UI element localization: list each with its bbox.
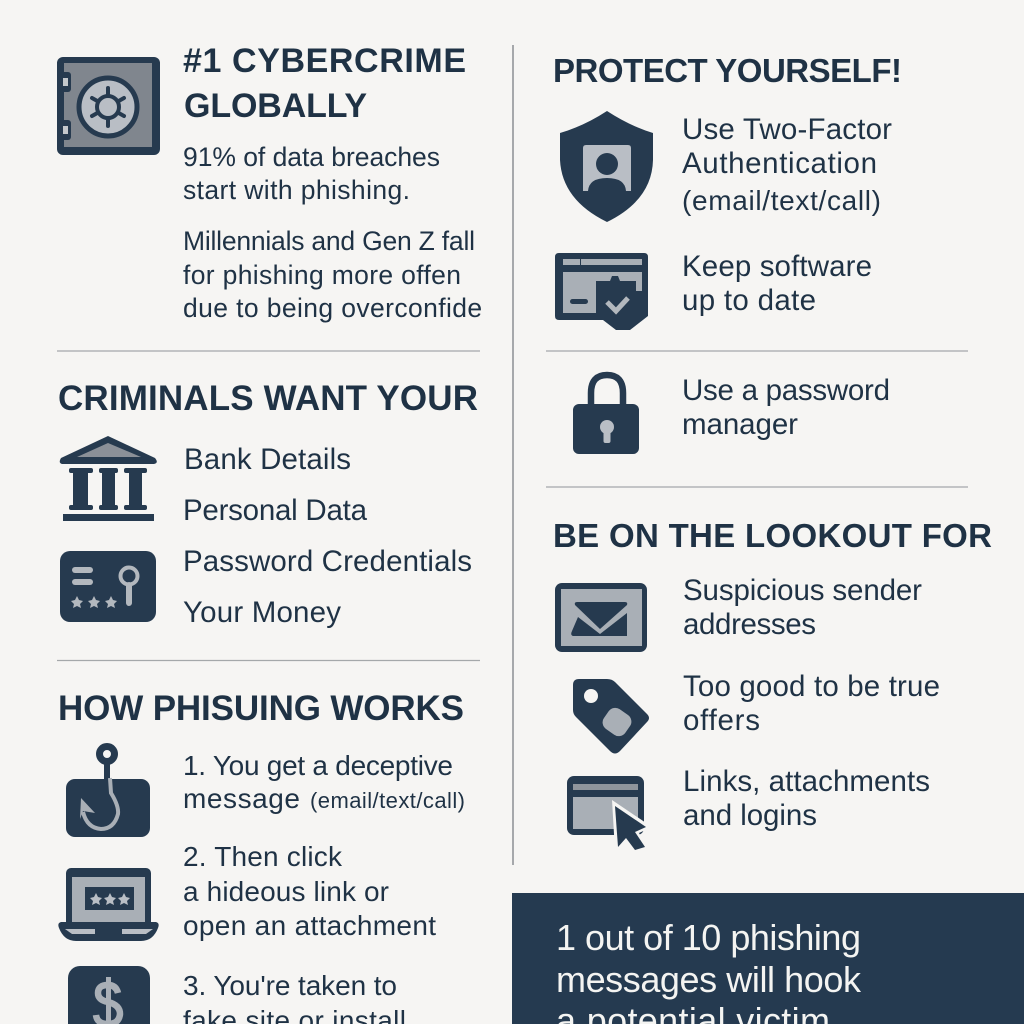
list: what criminals want: Personal Data	[183, 494, 368, 527]
text: keep software up to date: up to date	[682, 284, 816, 317]
text: step two: a hideous link or	[183, 876, 389, 907]
panel: criminals want your	[58, 379, 478, 629]
text: too good to be true: offers	[683, 704, 760, 737]
text: suspicious sender addresses	[683, 574, 922, 641]
text: two-factor authentication: Authentication	[682, 147, 877, 180]
text: step three	[183, 970, 406, 1024]
text: too good to be true: Too good to be true	[683, 670, 940, 703]
text: step one: 1. You get a deceptive	[183, 750, 453, 781]
icon: bank	[60, 436, 157, 521]
list: what criminals want	[183, 443, 472, 629]
heading: #1 cybercrime globally: GLOBALLY	[184, 87, 367, 125]
heading: be on the lookout for: BE ON THE LOOKOUT FOR	[553, 517, 992, 554]
list: what criminals want: Bank Details	[184, 443, 351, 476]
icon: price tag	[573, 679, 649, 754]
text: keep software up to date: Keep software	[682, 250, 872, 283]
callout: 1 out of 10: 1 out of 10 phishing	[556, 917, 861, 958]
text: millennials and Gen Z: Millennials and Gen Z fall	[183, 226, 475, 256]
text: millennials and Gen Z	[183, 230, 481, 322]
text: step two: open an attachment	[183, 910, 436, 941]
icon: shield with user	[560, 111, 653, 222]
text: two-factor authentication: Use Two-Factor	[682, 113, 892, 146]
text: millennials and Gen Z: for phishing more offen	[183, 260, 461, 290]
callout: 1 out of 10: messages will hook	[556, 959, 862, 1000]
text: two-factor authentication	[682, 113, 892, 216]
text: use a password manager: manager	[682, 408, 798, 441]
text: use a password manager: Use a password	[682, 374, 890, 407]
icon: safe	[57, 57, 160, 155]
text: data breach statistic: 91% of data breaches	[183, 142, 440, 172]
heading: #1 cybercrime globally: #1 CYBERCRIME	[183, 42, 466, 80]
text: links attachments logins: and logins	[683, 799, 817, 832]
heading: criminals want your: CRIMINALS WANT YOUR	[58, 379, 478, 418]
text: use a password manager	[682, 374, 890, 441]
text: keep software up to date	[682, 250, 872, 317]
panel: how phishing works	[58, 689, 465, 1024]
text: step one: message	[183, 783, 300, 814]
text: step two: 2. Then click	[183, 841, 343, 872]
callout: 1 out of 10	[512, 893, 1024, 1024]
text: two-factor authentication: (email/text/call)	[682, 185, 881, 216]
text: step three: 3. You're taken to	[183, 970, 397, 1001]
heading: protect yourself: PROTECT YOURSELF!	[553, 52, 902, 89]
icon: fish hook	[66, 746, 150, 837]
icon: dollar box	[68, 966, 150, 1024]
text: millennials and Gen Z: due to being overconfident	[183, 293, 506, 323]
text: data breach statistic: start with phishing.	[183, 175, 410, 205]
icon: browser with shield check	[555, 253, 648, 330]
text: step one	[183, 750, 465, 814]
panel: number one cybercrime	[57, 42, 506, 323]
list: what criminals want: Password Credentials	[183, 545, 472, 578]
text: step one: (email/text/call)	[310, 788, 465, 813]
icon: laptop	[58, 868, 159, 941]
panel: be on the lookout for	[553, 517, 992, 855]
icon: envelope	[555, 583, 647, 652]
text: suspicious sender addresses: Suspicious sender	[683, 574, 922, 607]
text: data breach statistic	[183, 142, 440, 205]
text: links attachments logins	[683, 765, 930, 832]
icon: padlock	[573, 375, 639, 454]
list: what criminals want: Your Money	[183, 596, 341, 629]
heading: how phishing works: HOW PHISUING WORKS	[58, 689, 464, 728]
text: too good to be true	[683, 670, 940, 737]
heading: #1 cybercrime globally	[183, 42, 466, 125]
panel: protect yourself	[553, 52, 902, 454]
text: suspicious sender addresses: addresses	[683, 608, 816, 641]
text: links attachments logins: Links, attachments	[683, 765, 930, 798]
text: step two	[183, 841, 436, 941]
icon: browser with cursor	[567, 776, 652, 855]
icon: credential card	[60, 551, 156, 622]
